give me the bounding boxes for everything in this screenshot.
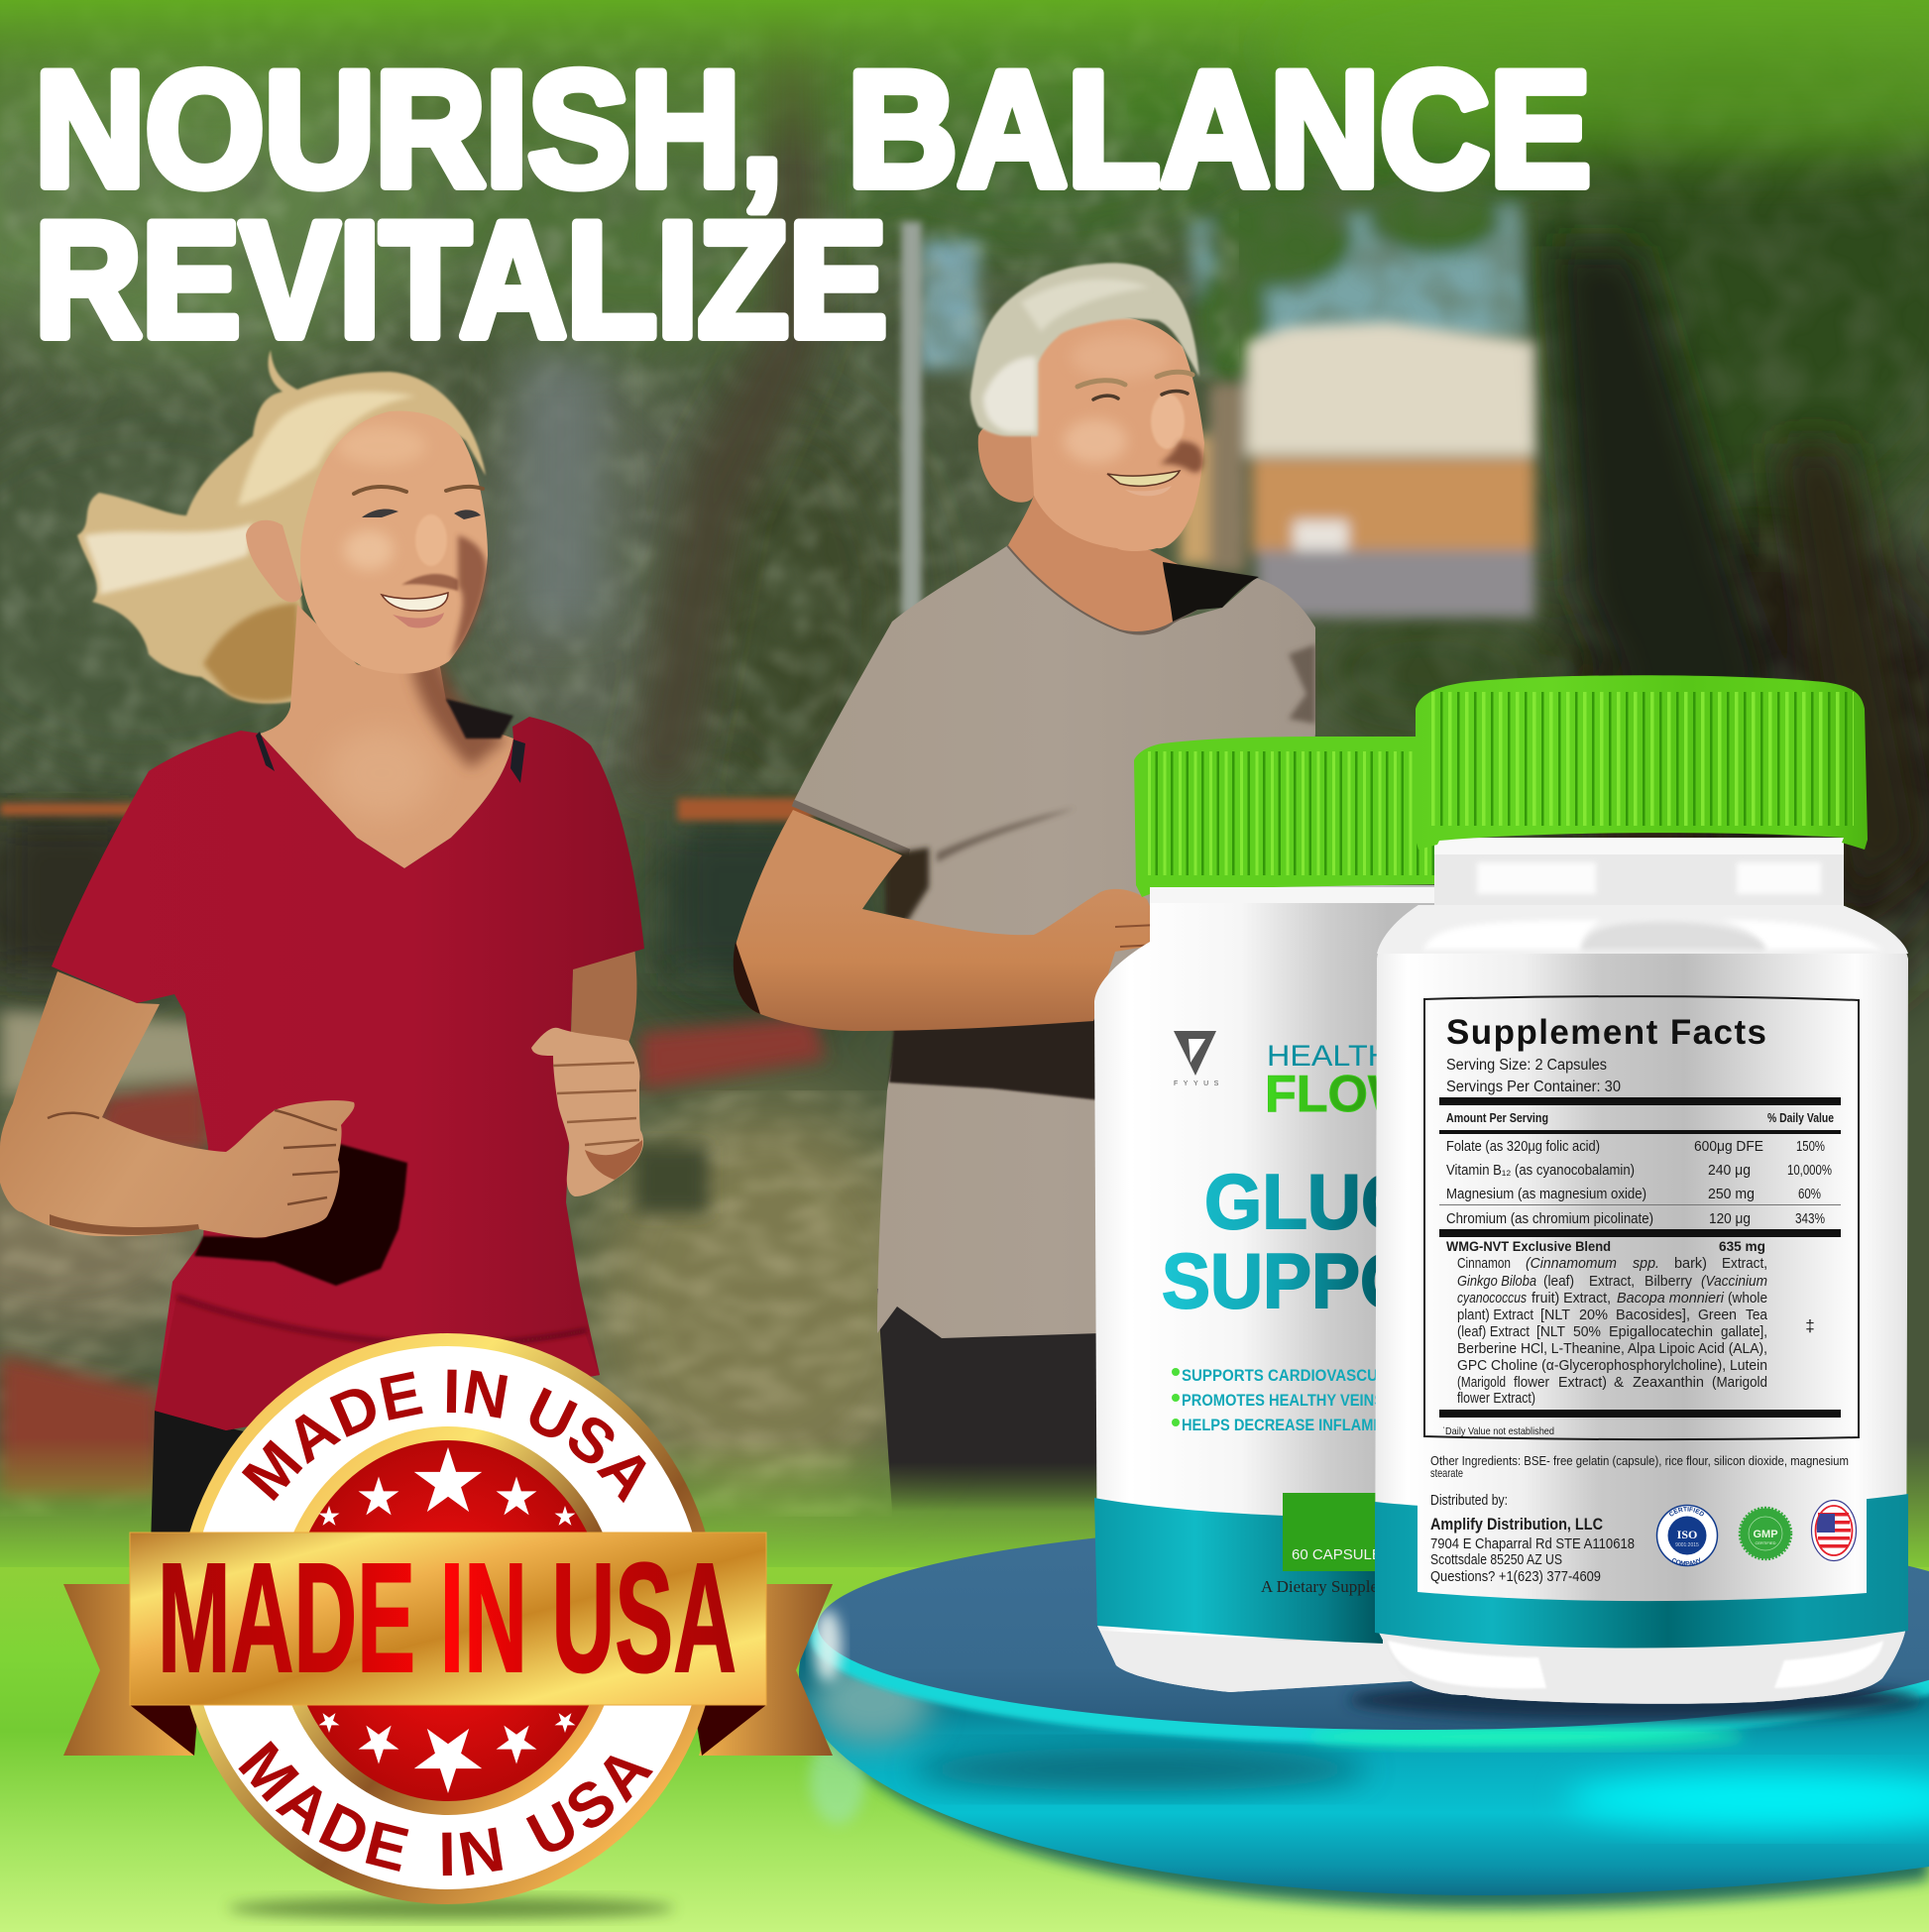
top stars	[319, 1447, 575, 1526]
green ground	[0, 1567, 1929, 1932]
blurred tree masses	[0, 0, 1929, 1515]
badge shadow	[228, 1897, 674, 1919]
blend ingredient text: [NLT	[1540, 1307, 1570, 1323]
front bottle	[1375, 675, 1908, 1704]
blend ingredient text: spp.	[1633, 1256, 1659, 1272]
blend ingredient text: (Vaccinium	[1701, 1274, 1767, 1290]
supplement facts panel: Serving Size: 2 Capsules	[1446, 1057, 1607, 1074]
blend ingredient text: Bacopa monnieri	[1617, 1291, 1725, 1307]
blend ingredient text: Green	[1698, 1307, 1737, 1323]
platform side wall	[799, 1626, 1929, 1895]
fist shadow on shirt	[194, 1143, 407, 1286]
curved bottom text: MADE IN USA	[238, 1741, 654, 1875]
supplement facts panel: ˈDaily Value not established	[1442, 1425, 1554, 1437]
benefit bullets: PROMOTES HEALTHY VEINS	[1182, 1392, 1384, 1410]
blend ingredient text: Cinnamon	[1457, 1256, 1511, 1272]
inner gold ring	[275, 1426, 622, 1815]
blend ingredient text	[1457, 1256, 1768, 1407]
facts rows	[1439, 1139, 1841, 1227]
blend ingredient text: (Marigold	[1712, 1375, 1767, 1391]
back bottle neck	[1150, 885, 1439, 955]
blurred building	[1180, 322, 1536, 618]
teal display platform	[799, 1522, 1929, 1908]
icon: GMP certified seal	[1741, 1509, 1790, 1558]
back bottle teal band	[1094, 1498, 1383, 1644]
man pants	[877, 1289, 1100, 1517]
man hair	[970, 263, 1199, 436]
woman face	[300, 411, 488, 674]
facts rows: Vitamin B₁₂ (as cyanocobalamin)	[1446, 1163, 1635, 1179]
icon: ISO certified seal: ISO	[1677, 1528, 1697, 1541]
bottom stars	[319, 1713, 575, 1793]
facts rows: 10,000%	[1787, 1163, 1832, 1179]
blend ingredient text: (leaf)	[1543, 1274, 1574, 1290]
man grey t-shirt	[793, 545, 1315, 1338]
supplement facts panel	[1424, 996, 1859, 1439]
platform bright rim	[811, 1531, 1929, 1745]
sky patches	[918, 187, 1528, 382]
outer gold ring	[176, 1333, 718, 1904]
woman hair	[77, 350, 486, 704]
woman right upper arm	[571, 947, 636, 1043]
front bottle teal band	[1375, 1494, 1908, 1648]
blend ingredient text: Tea	[1746, 1307, 1768, 1323]
woman neck and chest	[260, 605, 513, 868]
supplement facts panel: ‡	[1805, 1316, 1815, 1335]
neck shadow	[1163, 562, 1259, 622]
icon: ISO certified seal: 9001:2015	[1675, 1542, 1699, 1548]
blend ingredient text: gallate],	[1721, 1324, 1767, 1340]
benefit bullets: SUPPORTS CARDIOVASCULAR HEALTH	[1182, 1367, 1472, 1385]
blend ingredient text: Ginkgo Biloba	[1457, 1274, 1536, 1290]
woman red shirt	[52, 717, 644, 1430]
blend ingredient text: (leaf) Extract	[1457, 1324, 1530, 1340]
man ear	[978, 424, 1034, 503]
back bottle label text	[1162, 1031, 1571, 1596]
title headline: REVITALIZE	[35, 188, 887, 371]
blend ingredient text: Bacosides],	[1616, 1307, 1690, 1323]
man arm and hand	[734, 810, 1158, 1031]
facts border	[1424, 996, 1859, 1439]
platform top surface	[818, 1522, 1929, 1730]
back bottle label text: GLUCOSE	[1204, 1158, 1571, 1245]
blend ingredient text: Zeaxanthin	[1633, 1375, 1704, 1391]
supplement facts panel: 635 mg	[1719, 1238, 1765, 1254]
back bottle	[1094, 737, 1439, 1692]
icon: GMP certified seal: CERTIFIED	[1755, 1540, 1776, 1545]
benefit bullets	[1172, 1367, 1472, 1434]
facts rows: 150%	[1796, 1139, 1825, 1155]
blend ingredient text: Extract)	[1558, 1375, 1607, 1391]
supplement facts panel: WMG-NVT Exclusive Blend	[1446, 1238, 1611, 1254]
facts rows: Magnesium (as magnesium oxide)	[1446, 1187, 1646, 1202]
ground fade	[0, 1437, 1929, 1576]
front bottle base highlights	[1388, 1641, 1883, 1688]
blend ingredient text: Bilberry	[1645, 1274, 1693, 1290]
front bottle shoulder	[1377, 905, 1908, 954]
icon: ISO certified seal: CERTIFIED	[1669, 1507, 1704, 1517]
other ingredients and distributor text: Distributed by:	[1430, 1492, 1508, 1509]
banner headline: MADE IN USA	[158, 1532, 737, 1705]
front bottle neck	[1434, 838, 1844, 909]
blend ingredient text: (whole	[1728, 1291, 1767, 1307]
facts rows: Chromium (as chromium picolinate)	[1446, 1211, 1653, 1227]
brand logo: FYYUS	[1174, 1080, 1224, 1087]
blend ingredient text: 50%	[1573, 1324, 1601, 1340]
back bottle label text: SUPPORT	[1162, 1237, 1514, 1324]
back bottle body	[1094, 942, 1427, 1692]
mottled foliage texture	[0, 0, 1929, 991]
gold banner	[130, 1533, 766, 1705]
back bottle green cap	[1134, 737, 1439, 897]
blend ingredient text: bark)	[1674, 1256, 1707, 1272]
blend ingredient text: 20%	[1579, 1307, 1608, 1323]
capsule count box	[1283, 1493, 1392, 1571]
back bottle label text: FLOW	[1265, 1066, 1418, 1123]
woman left arm and fist	[0, 971, 355, 1237]
blend ingredient text: Berberine HCl, L-Theanine, Alpa Lipoic Acid (ALA),	[1457, 1341, 1767, 1357]
facts rows: 343%	[1795, 1211, 1825, 1227]
benefit bullets: HELPS DECREASE INFLAMMATION	[1182, 1417, 1429, 1434]
blend ingredient text: (Cinnamomum	[1526, 1256, 1617, 1272]
running track and path	[0, 1010, 826, 1497]
supplement facts panel: Servings Per Container: 30	[1446, 1079, 1621, 1095]
other ingredients and distributor text: 7904 E Chaparral Rd STE A110618	[1430, 1535, 1635, 1552]
grass texture	[0, 1090, 892, 1517]
blend ingredient text: fruit) Extract,	[1532, 1291, 1611, 1307]
icon: GMP certified seal: GMP	[1753, 1529, 1778, 1540]
other ingredients and distributor text: Scottsdale 85250 AZ US	[1430, 1551, 1562, 1568]
curved top text: MADE IN USA	[242, 1370, 646, 1503]
facts rows: 120 μg	[1709, 1211, 1751, 1227]
front bottle green cap	[1416, 675, 1868, 850]
back bottle base shading	[1100, 1631, 1427, 1692]
made in usa badge	[63, 1333, 833, 1926]
other ingredients and distributor text: Questions? +1(623) 377-4609	[1430, 1568, 1601, 1585]
title headline: BALANCE	[848, 38, 1591, 220]
supplement facts panel: Amount Per Serving	[1446, 1111, 1548, 1125]
blend ingredient text: flower	[1514, 1375, 1549, 1391]
icon: ISO certified seal: COMPANY	[1671, 1557, 1701, 1565]
white ring	[190, 1346, 706, 1889]
ribbon tails	[63, 1584, 833, 1756]
blend ingredient text: (Marigold	[1457, 1375, 1506, 1391]
front bottle body	[1375, 905, 1908, 1704]
back bottle label text: A Dietary Supplement	[1261, 1577, 1412, 1596]
other ingredients and distributor text: Other Ingredients: BSE- free gelatin (capsule), rice flour, silicon dioxide, magnesium	[1430, 1454, 1849, 1468]
red center	[288, 1440, 608, 1801]
other ingredients and distributor text	[1430, 1454, 1849, 1585]
woman jogging	[0, 350, 644, 1546]
blend ingredient text: flower Extract)	[1457, 1391, 1535, 1407]
man face	[1031, 317, 1204, 551]
back bottle neck rim	[1150, 887, 1439, 903]
blend ingredient text: cyanococcus	[1457, 1291, 1527, 1307]
woman pants	[151, 1411, 248, 1546]
top green wash	[0, 0, 1929, 169]
woman ear	[246, 520, 302, 603]
facts rows: 250 mg	[1708, 1187, 1755, 1202]
brand logo	[1174, 1031, 1224, 1087]
other ingredients and distributor text: Amplify Distribution, LLC	[1430, 1515, 1603, 1534]
fence rails and light pole	[0, 222, 922, 821]
blurred trunks and posts	[0, 0, 1929, 985]
man jogging	[734, 263, 1315, 1517]
other ingredients and distributor text: stearate	[1430, 1466, 1463, 1480]
supplement facts panel: % Daily Value	[1767, 1111, 1834, 1125]
front bottle label panel	[1418, 1482, 1867, 1601]
back bottle label text: HEALTH	[1267, 1040, 1391, 1073]
title headline	[35, 38, 1591, 371]
icon: USA flag seal	[1812, 1501, 1856, 1560]
facts rows: Folate (as 320μg folic acid)	[1446, 1139, 1600, 1155]
blend ingredient text: plant) Extract	[1457, 1307, 1533, 1323]
blend ingredient text: Extract,	[1589, 1274, 1635, 1290]
facts rows: 600μg DFE	[1694, 1139, 1763, 1155]
blend ingredient text: GPC Choline (α-Glycerophosphorylcholine), Lutein	[1457, 1358, 1767, 1374]
blend ingredient text: Epigallocatechin	[1609, 1324, 1713, 1340]
title headline: NOURISH,	[35, 38, 783, 220]
facts rows: 240 μg	[1708, 1163, 1751, 1179]
supplement facts panel: Supplement Facts	[1446, 1013, 1766, 1052]
front bottle base	[1378, 1626, 1906, 1704]
blend ingredient text: Extract,	[1722, 1256, 1767, 1272]
capsule count box: 60 CAPSULES	[1292, 1546, 1392, 1563]
blend ingredient text: &	[1614, 1375, 1624, 1391]
man neck	[1008, 496, 1180, 631]
blend ingredient text: [NLT	[1536, 1324, 1565, 1340]
arm shadow on shirt	[889, 1019, 1100, 1100]
platform ground shadow	[808, 1636, 1929, 1908]
facts rows: 60%	[1798, 1187, 1821, 1202]
woman right fist	[531, 1028, 643, 1196]
icon: ISO certified seal	[1655, 1505, 1719, 1566]
